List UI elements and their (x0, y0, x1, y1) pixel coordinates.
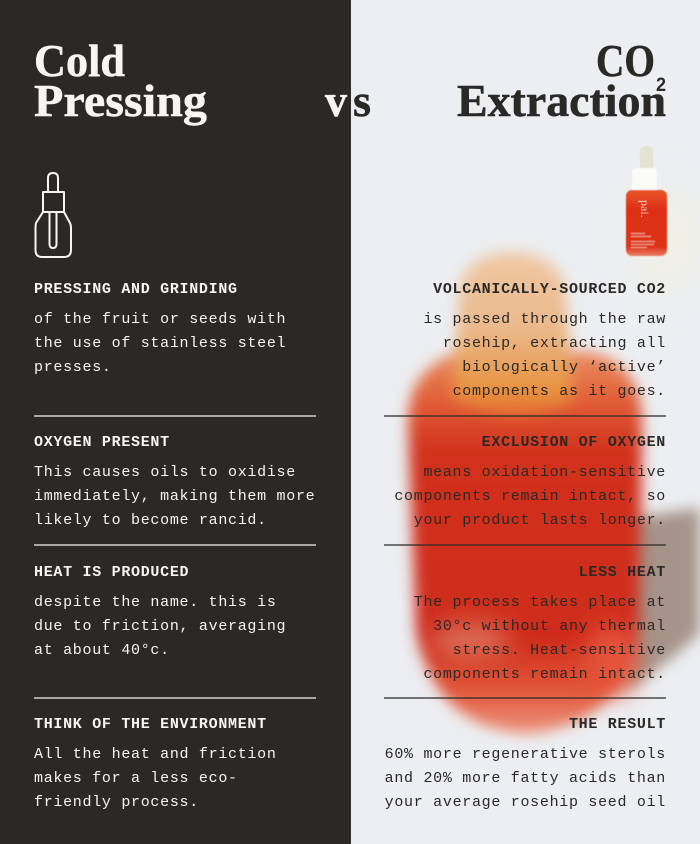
text block: heat is produced: HEAT IS PRODUCED (34, 564, 189, 581)
text block: exclusion of oxygen: components remain intact, so (394, 488, 666, 505)
text block: pressing and grinding: the use of stainless steel (34, 335, 286, 352)
title: CO2 Extraction (457, 36, 666, 126)
title: vs: v (325, 76, 347, 126)
text block: oxygen present: OXYGEN PRESENT (34, 434, 170, 451)
text block: less heat: 30°c without any thermal (433, 618, 666, 635)
text block: exclusion of oxygen: EXCLUSION OF OXYGEN (482, 434, 666, 451)
text block: think of the environment: friendly process. (34, 794, 199, 811)
text block: less heat: LESS HEAT (579, 564, 666, 581)
text block: the result: THE RESULT (569, 716, 666, 733)
text block: exclusion of oxygen: means oxidation-sensitive (423, 464, 666, 481)
text block: less heat: stress. Heat-sensitive (453, 642, 666, 659)
text block: think of the environment: All the heat and friction (34, 746, 277, 763)
text block: think of the environment: makes for a less eco- (34, 770, 238, 787)
text block: think of the environment (34, 716, 277, 811)
icon: product dropper bottle photo (626, 146, 667, 256)
text block: the result: your average rosehip seed oil (385, 794, 666, 811)
text block: heat is produced (34, 564, 286, 659)
text block: volcanically-sourced CO2: biologically ‘active’ (462, 359, 666, 376)
text block: less heat (414, 564, 666, 683)
title: Cold Pressing: Pressing (34, 76, 208, 126)
title: CO2 Extraction: Extraction (457, 76, 666, 126)
title: CO2 Extraction: CO (596, 36, 655, 86)
title: vs (325, 76, 371, 126)
text block: think of the environment: THINK OF THE ENVIRONMENT (34, 716, 267, 733)
text block: heat is produced: at about 40°c. (34, 642, 170, 659)
title: Cold Pressing (34, 36, 208, 126)
text block: heat is produced: due to friction, averaging (34, 618, 286, 635)
text block: the result (385, 716, 666, 811)
icon: outline dropper bottle (36, 173, 71, 257)
text block: volcanically-sourced CO2: rosehip, extracting all (443, 335, 666, 352)
text block: exclusion of oxygen (394, 434, 666, 529)
text block: less heat: The process takes place at (414, 594, 666, 611)
text block: volcanically-sourced CO2: is passed through the raw (423, 311, 666, 328)
panel: CO2 extraction blurred photo background (351, 0, 700, 844)
text block: the result: 60% more regenerative sterols (385, 746, 666, 763)
text block: oxygen present: This causes oils to oxidise (34, 464, 296, 481)
text block: less heat: components remain intact. (423, 666, 666, 683)
icon: product dropper bottle photo: pai. (638, 200, 652, 218)
text block: volcanically-sourced CO2: components as it goes. (453, 383, 666, 400)
text block: volcanically-sourced CO2: VOLCANICALLY-SOURCED CO2 (433, 281, 666, 298)
text block: oxygen present: likely to become rancid. (34, 512, 267, 529)
text block: exclusion of oxygen: your product lasts longer. (414, 512, 666, 529)
text block: volcanically-sourced CO2 (423, 281, 666, 400)
text block: pressing and grinding: presses. (34, 359, 112, 376)
panel: cold pressing background (0, 0, 351, 844)
text block: oxygen present (34, 434, 315, 529)
text block: the result: and 20% more fatty acids than (385, 770, 666, 787)
text block: pressing and grinding: PRESSING AND GRINDING (34, 281, 238, 298)
text block: pressing and grinding (34, 281, 286, 376)
title: Cold Pressing: Cold (34, 36, 125, 86)
text block: oxygen present: immediately, making them more (34, 488, 315, 505)
text block: pressing and grinding: of the fruit or seeds with (34, 311, 286, 328)
title: CO2 Extraction: 2 (656, 75, 666, 96)
title: vs: s (353, 76, 371, 126)
text block: heat is produced: despite the name. this is (34, 594, 277, 611)
